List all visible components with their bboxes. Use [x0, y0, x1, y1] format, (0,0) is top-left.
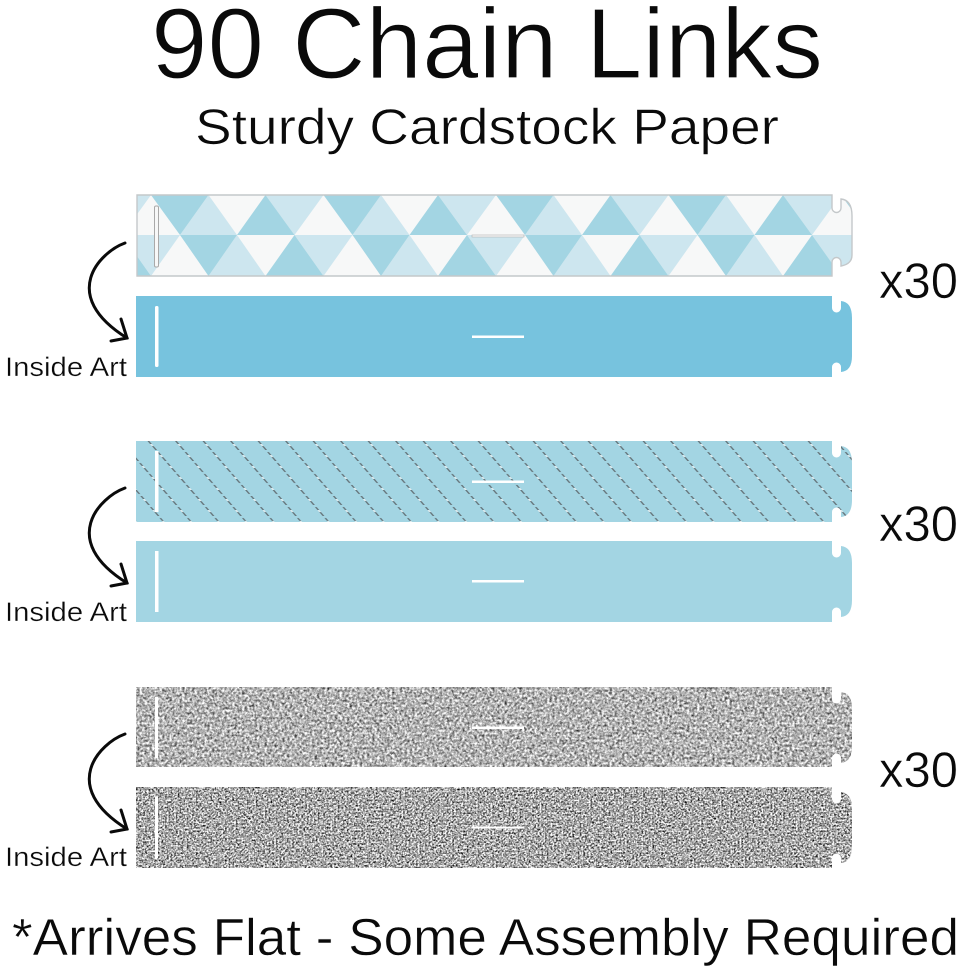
- group 2: striped links: [5, 441, 958, 627]
- quantity: x30: [879, 742, 958, 798]
- label: inside art: Inside Art: [5, 842, 128, 872]
- link: diagonal stripes front: [136, 441, 852, 522]
- subtitle: Sturdy Cardstock Paper: [195, 99, 779, 155]
- label: inside art: Inside Art: [5, 597, 128, 627]
- footer note: *Arrives Flat - Some Assembly Required: [12, 909, 959, 967]
- quantity: x30: [879, 496, 958, 552]
- quantity: x30: [879, 253, 958, 309]
- arrow: [89, 734, 127, 832]
- link: solid blue inside art: [136, 296, 852, 377]
- label: inside art: Inside Art: [5, 352, 128, 382]
- link: pale blue inside art: [136, 541, 852, 622]
- link: glitter inside art: [136, 787, 852, 868]
- link: triangle pattern front: [137, 195, 852, 276]
- link: glitter front: [136, 687, 852, 767]
- arrow: [89, 488, 127, 586]
- group 1: triangle pattern links: [5, 195, 958, 382]
- group 3: silver glitter links: [5, 687, 958, 872]
- arrow: [89, 243, 127, 341]
